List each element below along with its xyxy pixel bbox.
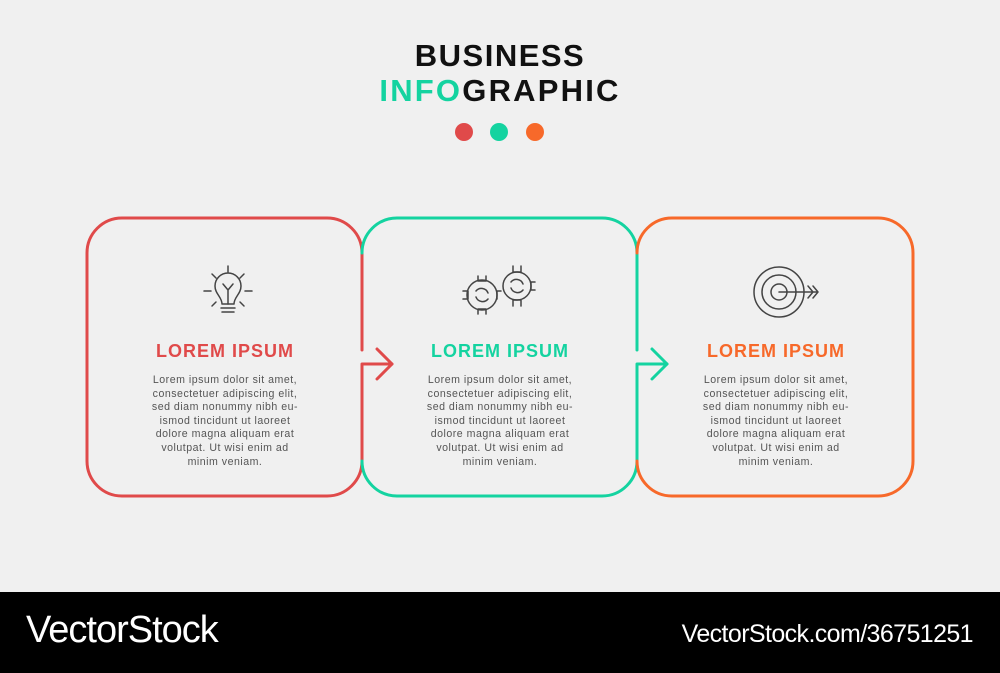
text: orange: Lorem ipsum dolor sit amet,	[704, 374, 848, 386]
text: red: volutpat. Ut wisi enim ad	[161, 442, 289, 454]
text: orange: minim veniam.	[739, 456, 813, 468]
dots	[455, 123, 544, 141]
text: red: consectetuer adipiscing elit,	[153, 388, 297, 400]
text: red: sed diam nonummy nibh eu-	[152, 401, 298, 413]
text: red: Lorem ipsum dolor sit amet,	[153, 374, 297, 386]
text: green: consectetuer adipiscing elit,	[428, 388, 572, 400]
icon: light bulb	[204, 266, 252, 312]
text: red	[152, 374, 298, 468]
panel: green box	[362, 218, 667, 496]
text: green: sed diam nonummy nibh eu-	[427, 401, 573, 413]
footer	[0, 592, 1000, 673]
heading: green: LOREM IPSUM	[431, 341, 569, 361]
text: red: ismod tincidunt ut laoreet	[160, 415, 290, 427]
text: red: minim veniam.	[188, 456, 262, 468]
text: green	[427, 374, 573, 468]
text: orange	[703, 374, 849, 468]
title: BUSINESS	[415, 38, 585, 73]
title	[379, 38, 621, 108]
text: green: dolore magna aliquam erat	[431, 428, 569, 440]
panel: orange box	[637, 218, 913, 496]
text: orange: sed diam nonummy nibh eu-	[703, 401, 849, 413]
text: red: dolore magna aliquam erat	[156, 428, 294, 440]
text: green: Lorem ipsum dolor sit amet,	[428, 374, 572, 386]
panel: red box	[87, 218, 392, 496]
text: orange: ismod tincidunt ut laoreet	[711, 415, 841, 427]
footer: VectorStock.com/36751251	[682, 620, 973, 648]
icon: gears	[463, 266, 535, 314]
icon: target	[754, 267, 818, 317]
footer: VectorStock	[26, 609, 218, 651]
text: green: ismod tincidunt ut laoreet	[435, 415, 565, 427]
heading: red: LOREM IPSUM	[156, 341, 294, 361]
heading: orange: LOREM IPSUM	[707, 341, 845, 361]
title: INFOGRAPHIC	[379, 73, 621, 108]
text: green: minim veniam.	[463, 456, 537, 468]
text: green: volutpat. Ut wisi enim ad	[436, 442, 564, 454]
text: orange: volutpat. Ut wisi enim ad	[712, 442, 840, 454]
text: orange: consectetuer adipiscing elit,	[704, 388, 848, 400]
text: orange: dolore magna aliquam erat	[707, 428, 845, 440]
